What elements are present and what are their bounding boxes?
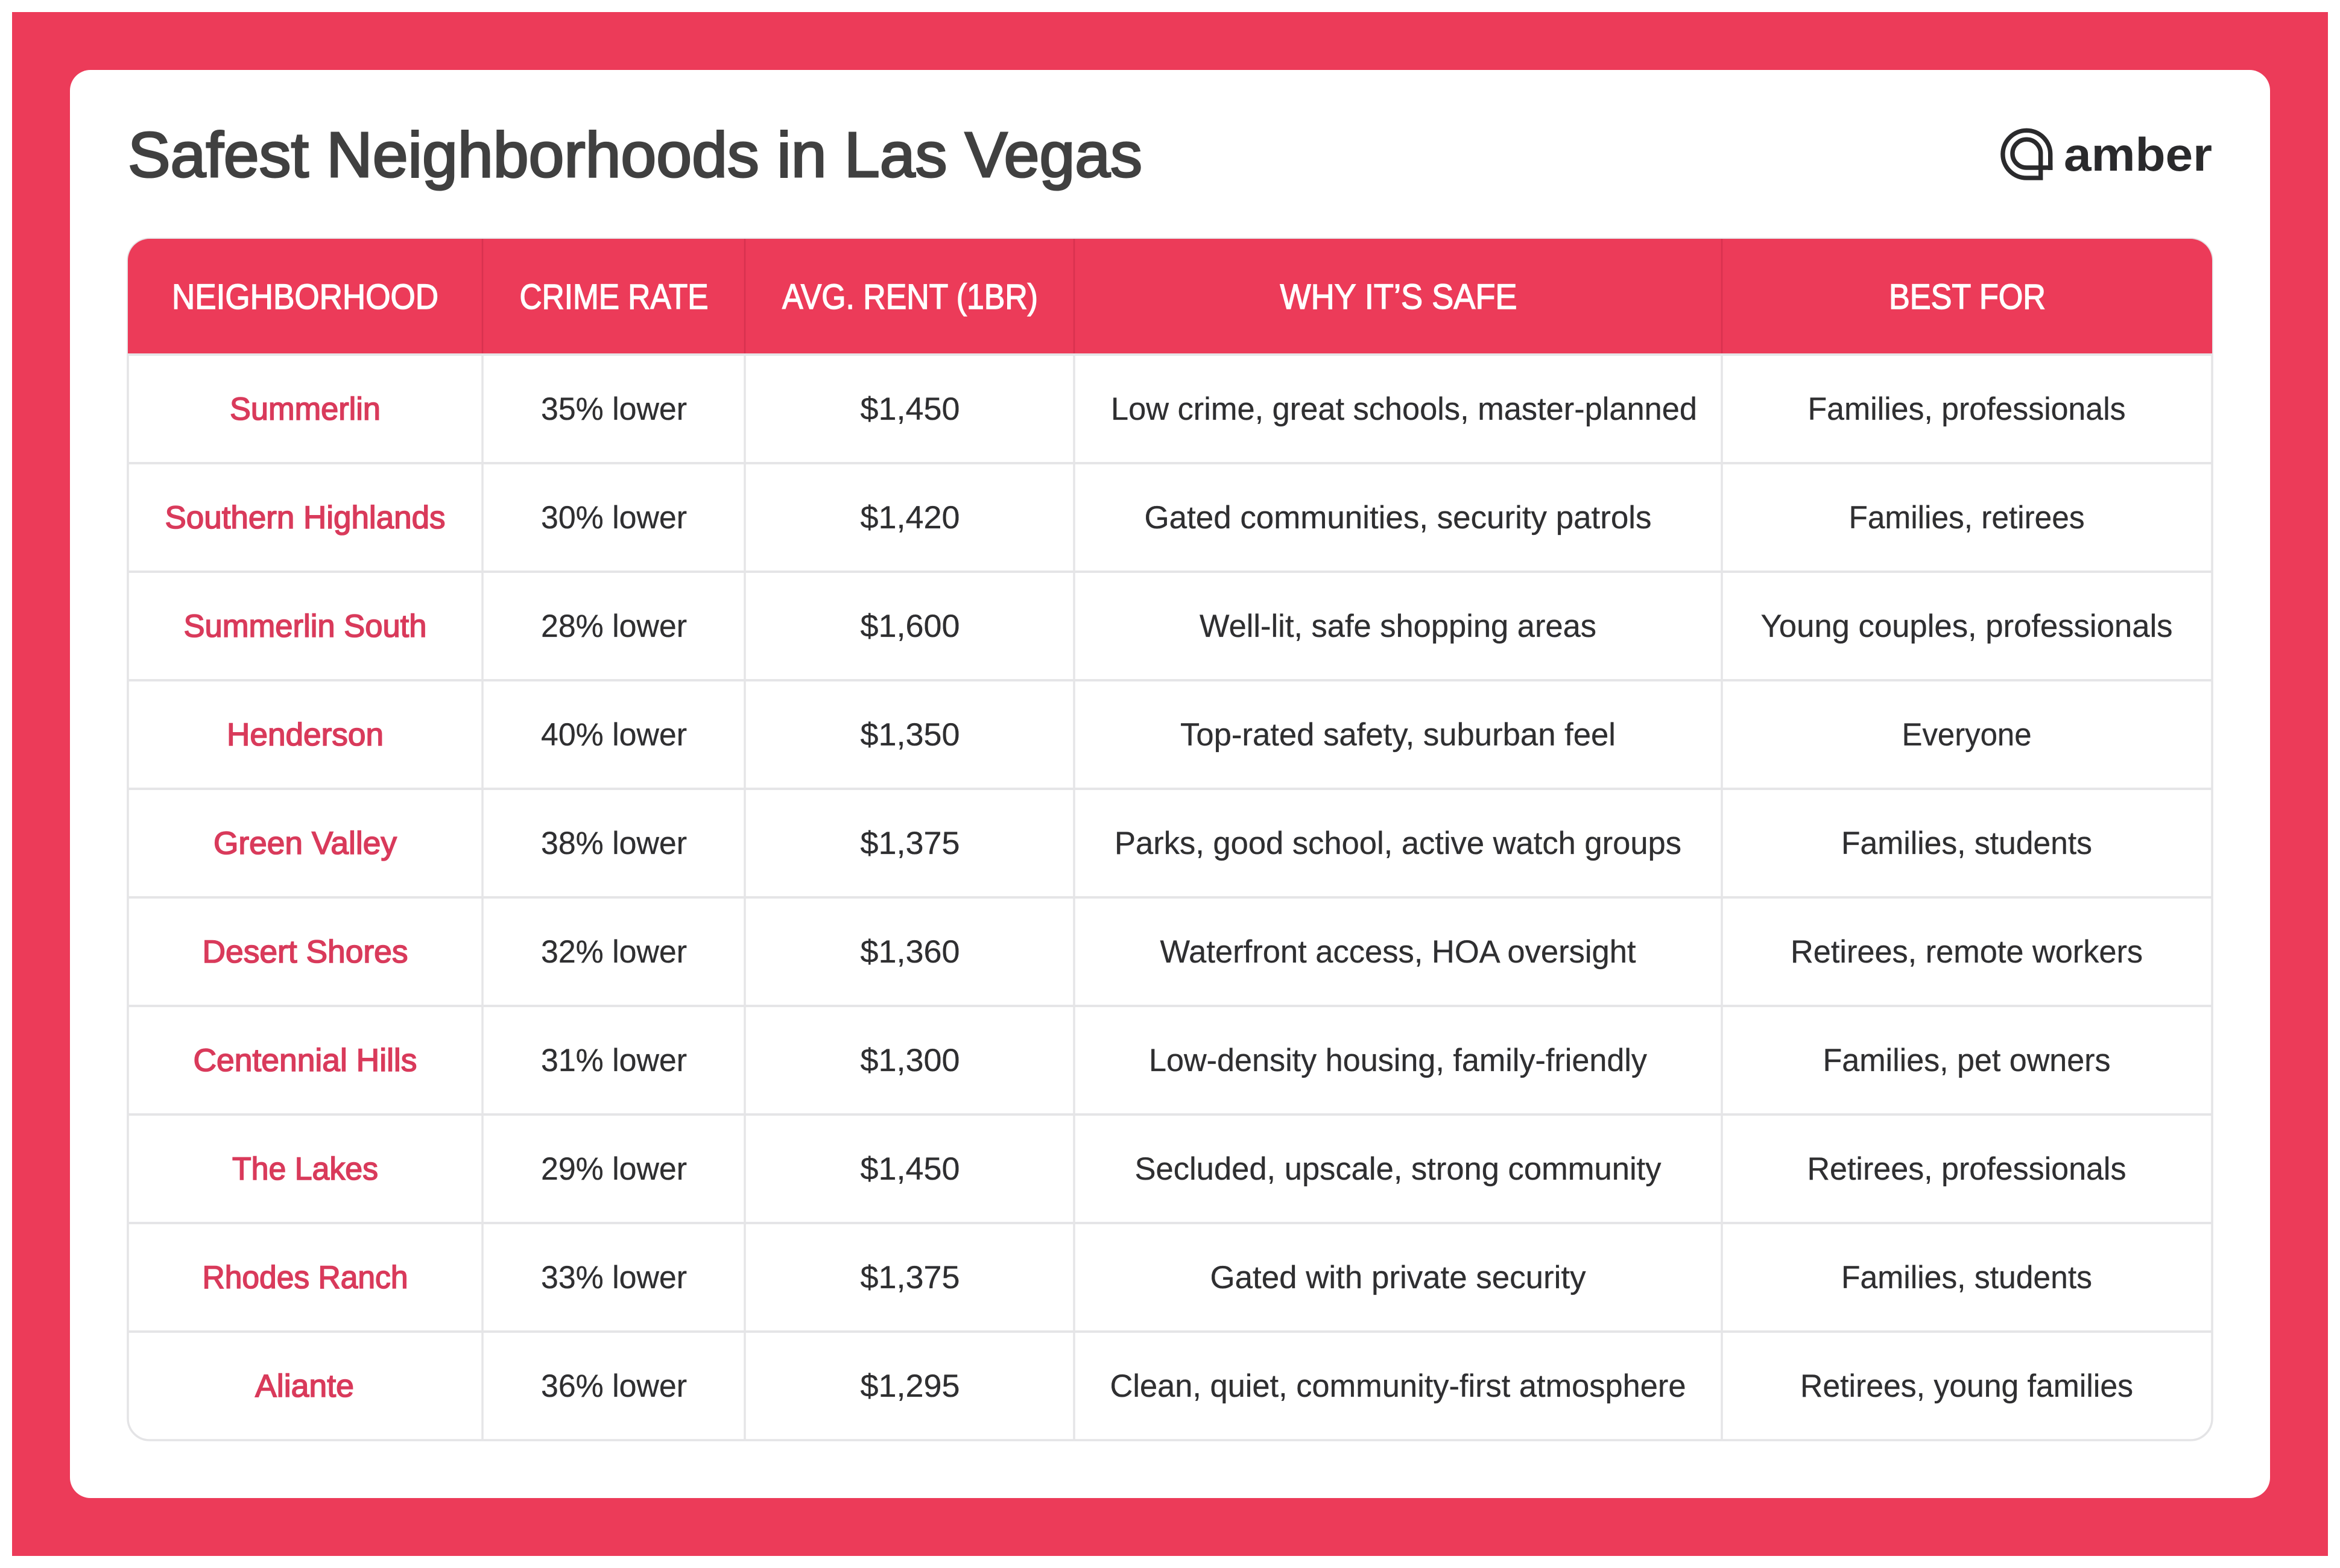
best for: Families, pet owners <box>1823 1043 2111 1078</box>
best for: Families, students <box>1841 826 2092 861</box>
why safe: Gated communities, security patrols <box>1145 500 1651 536</box>
neighborhood name: Rhodes Ranch <box>203 1260 408 1295</box>
average rent: $1,350 <box>860 717 960 753</box>
row: Henderson <box>227 717 2031 753</box>
crime rate: 29% lower <box>541 1151 687 1187</box>
header: why it's safe: WHY IT’S SAFE <box>1280 277 1517 317</box>
crime rate: 31% lower <box>541 1043 687 1078</box>
best for: Families, students <box>1841 1260 2092 1295</box>
crime rate: 30% lower <box>541 500 687 536</box>
average rent: $1,360 <box>860 934 960 970</box>
title: Safest Neighborhoods in Las Vegas <box>128 119 1142 191</box>
row: Centennial Hills <box>193 1043 2111 1078</box>
neighborhood name: Summerlin <box>230 391 381 427</box>
best for: Families, professionals <box>1808 391 2125 427</box>
best for: Everyone <box>1902 717 2031 753</box>
icon: amber logo mark <box>2003 130 2053 178</box>
row: Summerlin <box>230 391 2125 427</box>
neighborhood name: The Lakes <box>232 1151 378 1187</box>
row: Summerlin South <box>183 609 2172 644</box>
average rent: $1,375 <box>860 1260 960 1295</box>
average rent: $1,420 <box>860 500 960 536</box>
neighborhood name: Desert Shores <box>203 934 408 970</box>
best for: Retirees, remote workers <box>1791 934 2143 970</box>
why safe: Clean, quiet, community-first atmosphere <box>1110 1368 1686 1404</box>
crime rate: 28% lower <box>541 609 687 644</box>
crime rate: 32% lower <box>541 934 687 970</box>
row: Aliante <box>255 1368 2133 1404</box>
row: Desert Shores <box>203 934 2143 970</box>
average rent: $1,375 <box>860 826 960 861</box>
table header row <box>128 239 2212 353</box>
why safe: Low-density housing, family-friendly <box>1149 1043 1647 1078</box>
header: average rent: AVG. RENT (1BR) <box>782 277 1038 317</box>
why safe: Parks, good school, active watch groups <box>1115 826 1681 861</box>
row: Rhodes Ranch <box>203 1260 2092 1295</box>
amber logo <box>2003 128 2212 181</box>
why safe: Gated with private security <box>1210 1260 1586 1295</box>
why safe: Top-rated safety, suburban feel <box>1180 717 1616 753</box>
neighborhood name: Green Valley <box>213 826 397 861</box>
best for: Retirees, young families <box>1800 1368 2133 1404</box>
average rent: $1,450 <box>860 391 960 427</box>
neighborhood name: Southern Highlands <box>165 500 445 536</box>
table body outline <box>128 239 2212 1440</box>
neighborhood name: Centennial Hills <box>193 1043 417 1078</box>
header: crime rate: CRIME RATE <box>520 277 708 317</box>
row: Southern Highlands <box>165 500 2084 536</box>
best for: Retirees, professionals <box>1807 1151 2127 1187</box>
average rent: $1,450 <box>860 1151 960 1187</box>
average rent: $1,295 <box>860 1368 960 1404</box>
best for: Families, retirees <box>1849 500 2084 536</box>
logo wordmark: amber <box>2064 128 2212 181</box>
crime rate: 35% lower <box>541 391 687 427</box>
crime rate: 33% lower <box>541 1260 687 1295</box>
header: best for: BEST FOR <box>1889 277 2046 317</box>
why safe: Secluded, upscale, strong community <box>1135 1151 1662 1187</box>
average rent: $1,600 <box>860 609 960 644</box>
row: Green Valley <box>213 826 2092 861</box>
neighborhood name: Summerlin South <box>183 609 427 644</box>
crime rate: 40% lower <box>541 717 687 753</box>
table <box>128 239 2212 1440</box>
row: The Lakes <box>232 1151 2127 1187</box>
crime rate: 36% lower <box>541 1368 687 1404</box>
header: neighborhood: NEIGHBORHOOD <box>172 277 438 317</box>
neighborhood name: Henderson <box>227 717 384 753</box>
best for: Young couples, professionals <box>1761 609 2172 644</box>
crime rate: 38% lower <box>541 826 687 861</box>
why safe: Waterfront access, HOA oversight <box>1160 934 1636 970</box>
why safe: Low crime, great schools, master-planned <box>1111 391 1697 427</box>
average rent: $1,300 <box>860 1043 960 1078</box>
neighborhood name: Aliante <box>255 1368 354 1404</box>
why safe: Well-lit, safe shopping areas <box>1200 609 1596 644</box>
